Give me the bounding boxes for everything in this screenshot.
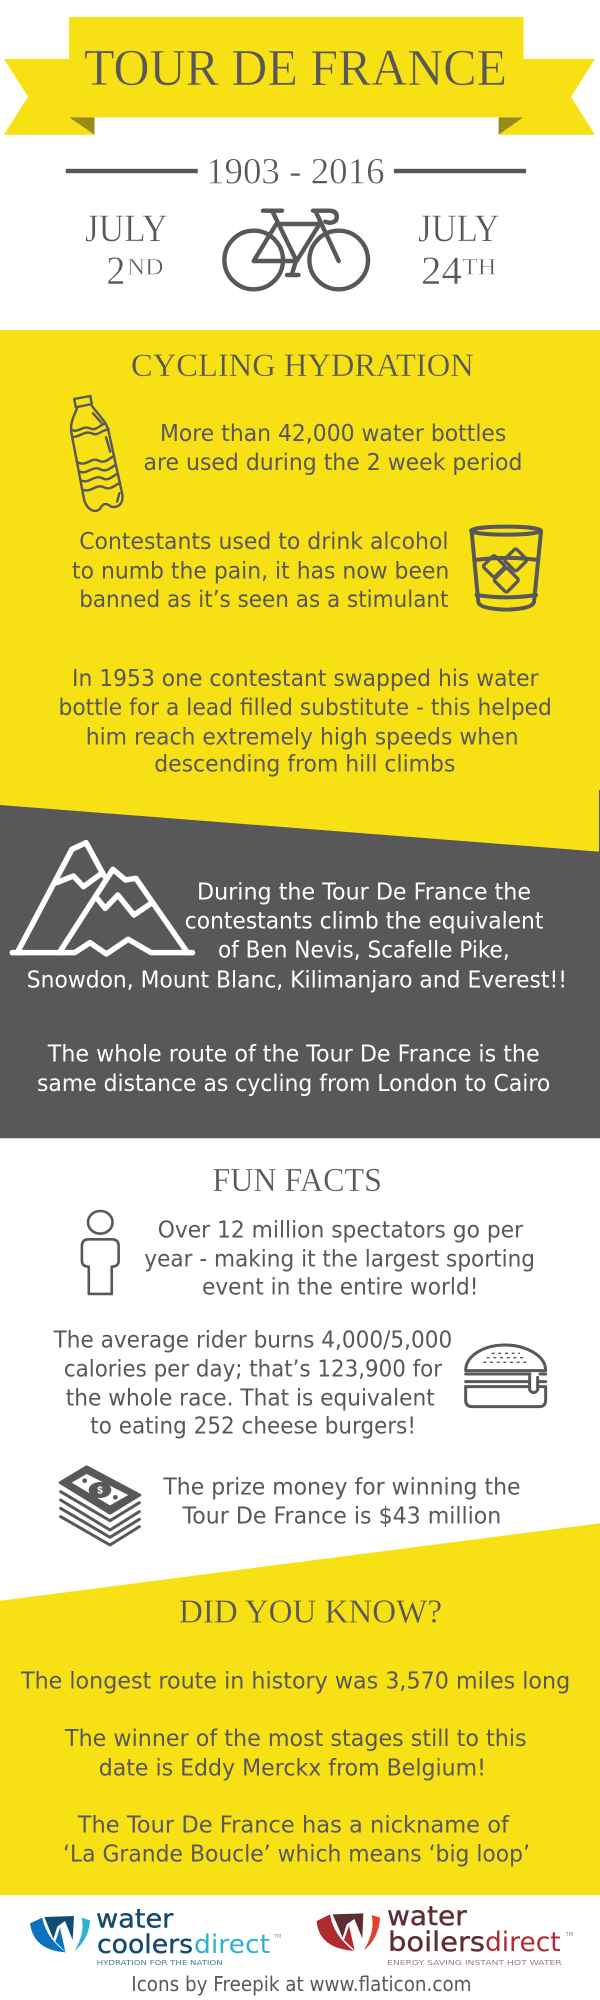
icon: burger	[466, 1345, 546, 1407]
logo: water coolers direct: HYDRATION FOR THE NATION	[97, 1959, 223, 1967]
end date: JULY	[418, 207, 499, 250]
text: prize money fact	[162, 1474, 520, 1529]
text: nickname fact: ‘La Grande Boucle’ which means ‘big loop’	[63, 1841, 530, 1867]
text: lead bottle fact: In 1953 one contestant swapped his water	[72, 666, 539, 692]
text: calories fact	[53, 1328, 452, 1440]
start date: 2	[106, 248, 125, 293]
text: most stages fact	[64, 1726, 527, 1781]
text: water bottles fact: More than 42,000 water bottles	[160, 421, 506, 447]
text: longest route fact: The longest route in history was 3,570 miles long	[20, 1668, 570, 1694]
logo: water boilers direct: water	[387, 1901, 468, 1932]
logo: water boilers direct	[317, 1901, 573, 1967]
text: calories fact: calories per day; that’s 123,900 for	[64, 1357, 443, 1383]
logo: water coolers direct	[30, 1905, 281, 1967]
text: climbing fact: During the Tour De France the	[197, 879, 531, 905]
icon: whisky glass	[471, 527, 541, 610]
text: lead bottle fact	[58, 666, 552, 778]
text: climbing fact: of Ben Nevis, Scafelle Pike,	[218, 937, 510, 963]
heading: did you know: DID YOU KNOW?	[179, 1594, 442, 1631]
header ribbon with title	[4, 17, 595, 135]
text: climbing fact: Snowdon, Mount Blanc, Kilimanjaro and Everest!!	[27, 968, 567, 994]
heading: fun facts: FUN FACTS	[212, 1162, 382, 1199]
text: spectators fact: year - making it the largest sporting	[144, 1247, 535, 1273]
text: alcohol fact	[72, 529, 449, 613]
icon: stack of money: $	[97, 1486, 103, 1497]
text: water bottles fact: are used during the 2 week period	[144, 450, 522, 476]
text: most stages fact: date is Eddy Merckx from Belgium!	[99, 1755, 486, 1781]
logo: water boilers direct: TM	[565, 1932, 573, 1938]
panel: cycling hydration background	[0, 330, 600, 855]
icon: person	[82, 1211, 119, 1294]
text: spectators fact	[144, 1218, 535, 1300]
logo: water coolers direct: TM	[273, 1934, 281, 1940]
text: lead bottle fact: him reach extremely high speeds when	[86, 724, 519, 750]
heading: cycling hydration: CYCLING HYDRATION	[131, 348, 474, 384]
logo: water coolers direct: direct	[194, 1930, 270, 1960]
panel: did you know background	[0, 1523, 600, 1895]
end date	[418, 207, 499, 293]
logo: water boilers direct: direct	[485, 1927, 561, 1958]
text: nickname fact	[63, 1812, 530, 1867]
text: route distance fact: same distance as cycling from London to Cairo	[37, 1071, 550, 1097]
text: climbing fact: contestants climb the equivalent	[185, 908, 543, 934]
icon: bicycle	[224, 211, 368, 289]
logo: water boilers direct: boilers	[388, 1927, 485, 1958]
logo: water coolers direct: water	[96, 1905, 174, 1935]
start date: JULY	[85, 207, 168, 250]
date range with rules: 1903 - 2016	[206, 151, 385, 192]
text: prize money fact: The prize money for winning the	[162, 1474, 520, 1500]
icon: mountains	[12, 843, 192, 954]
text: lead bottle fact: bottle for a lead filled substitute - this helped	[58, 695, 552, 721]
start date	[85, 207, 168, 293]
credit line: Icons by Freepik at www.flaticon.com	[131, 1972, 472, 1996]
logo: water coolers direct: coolers	[97, 1930, 193, 1960]
text: spectators fact: Over 12 million spectators go per	[158, 1218, 524, 1244]
text: calories fact: The average rider burns 4,000/5,000	[53, 1328, 452, 1354]
end date: TH	[462, 255, 496, 280]
text: route distance fact	[37, 1042, 550, 1097]
start date: ND	[127, 255, 163, 280]
icon: water bottle	[71, 396, 123, 511]
text: prize money fact: Tour De France is $43 million	[182, 1503, 501, 1529]
text: water bottles fact	[144, 421, 522, 476]
text: alcohol fact: banned as it’s seen as a stimulant	[79, 587, 448, 613]
text: calories fact: the whole race. That is equivalent	[66, 1386, 435, 1412]
text: alcohol fact: Contestants used to drink alcohol	[79, 529, 448, 555]
text: lead bottle fact: descending from hill climbs	[154, 752, 455, 778]
text: most stages fact: The winner of the most stages still to this	[64, 1726, 527, 1752]
text: route distance fact: The whole route of the Tour De France is the	[47, 1042, 540, 1068]
text: climbing fact	[27, 879, 567, 994]
logo: water boilers direct: ENERGY SAVING INSTANT HOT WATER	[387, 1959, 562, 1967]
text: nickname fact: The Tour De France has a nickname of	[77, 1812, 510, 1838]
panel: mountains background	[0, 790, 600, 1138]
end date: 24	[421, 248, 462, 293]
text: calories fact: to eating 252 cheese burgers!	[90, 1414, 416, 1440]
date range with rules	[66, 151, 526, 192]
text: spectators fact: event in the entire world!	[202, 1274, 478, 1300]
icon: stack of money	[60, 1467, 140, 1545]
text: alcohol fact: to numb the pain, it has now been	[72, 558, 449, 584]
title: TOUR DE FRANCE	[84, 40, 507, 97]
